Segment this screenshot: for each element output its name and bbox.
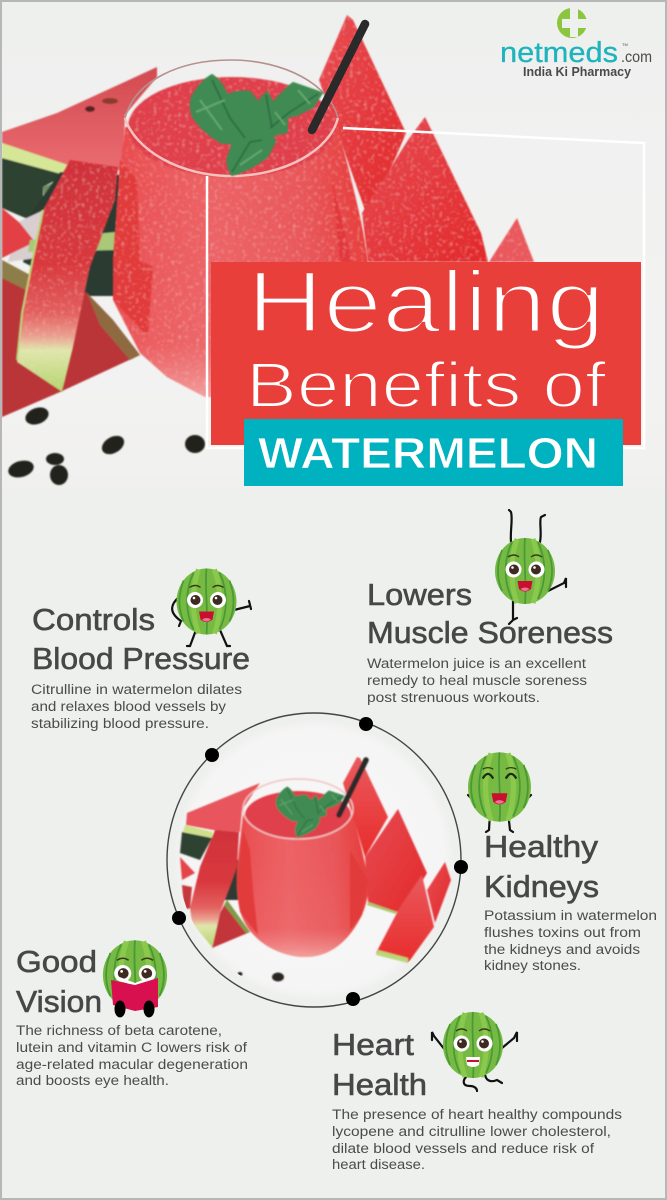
title line: Healing: Healing <box>247 254 605 351</box>
body text: lutein and vitamin C lowers risk of <box>16 1040 247 1056</box>
seeds <box>272 972 284 982</box>
netmeds logo: India Ki Pharmacy <box>523 65 631 79</box>
heading: Blood Pressure <box>32 641 250 676</box>
front melon slice <box>17 160 118 392</box>
body text: dilate blood vessels and reduce risk of <box>332 1141 594 1157</box>
glass <box>237 815 368 957</box>
body text: heart disease. <box>332 1157 425 1173</box>
straw <box>339 760 366 815</box>
glass rim <box>125 60 338 176</box>
icon: melon mascot doing handstand <box>495 510 566 624</box>
middle right wedge <box>362 117 488 262</box>
mint leaves <box>191 75 322 175</box>
middle wedge <box>365 809 427 912</box>
section: heart health <box>332 1012 622 1173</box>
title banner: watermelon: WATERMELON <box>258 429 598 478</box>
body text <box>31 682 242 732</box>
section: good vision <box>16 940 248 1089</box>
icon: melon mascot reading book <box>103 940 167 1018</box>
body text: age-related macular degeneration <box>16 1057 248 1073</box>
body text: and boosts eye health. <box>16 1073 169 1089</box>
heading <box>16 944 102 1019</box>
section: lowers muscle soreness <box>367 510 613 706</box>
heading <box>332 1027 427 1102</box>
heading <box>32 602 250 676</box>
body text: Potassium in watermelon <box>484 908 657 924</box>
body text: Citrulline in watermelon dilates <box>31 682 242 698</box>
small right wedge <box>489 218 534 262</box>
heading: Muscle Soreness <box>367 615 613 650</box>
body text: The presence of heart healthy compounds <box>332 1107 622 1123</box>
front wedge <box>376 875 434 963</box>
body text <box>367 656 587 706</box>
title frame line <box>207 128 644 448</box>
body text: The richness of beta carotene, <box>16 1023 222 1039</box>
body text <box>16 1023 248 1089</box>
heading: Healthy <box>484 829 599 864</box>
title line: Benefits of: Benefits of <box>246 349 606 421</box>
seeds <box>6 404 205 485</box>
body text <box>332 1107 622 1173</box>
heading: Vision <box>16 984 102 1019</box>
netmeds logo <box>500 5 652 79</box>
heading: Kidneys <box>484 869 599 904</box>
netmeds logo: TM <box>622 42 628 47</box>
mint <box>276 787 344 837</box>
heading <box>367 577 613 650</box>
section: controls blood pressure <box>31 568 251 732</box>
body text: lycopene and citrulline lower cholesterol, <box>332 1124 611 1140</box>
body text: the kidneys and avoids <box>484 942 640 958</box>
left melon pile <box>2 67 157 417</box>
body text: kidney stones. <box>484 958 581 974</box>
straw <box>312 24 365 130</box>
netmeds logo: netmeds <box>500 37 618 69</box>
icon: melon mascot jumping <box>432 1012 517 1091</box>
body text: and relaxes blood vessels by <box>31 699 227 715</box>
heading: Controls <box>32 602 155 637</box>
title banner: watermelon <box>244 419 623 486</box>
heading: Lowers <box>367 577 472 612</box>
tall wedge <box>343 757 388 857</box>
right small wedge <box>427 862 451 923</box>
icon: melon mascot waving <box>172 568 251 646</box>
connector dots <box>172 717 468 1006</box>
icon: melon mascot laughing <box>468 752 531 832</box>
front slice <box>190 830 239 947</box>
body text: flushes toxins out from <box>484 925 641 941</box>
hero photo: watermelon juice glass and slices <box>2 14 535 486</box>
body text <box>484 908 657 974</box>
section: healthy kidneys <box>468 752 657 974</box>
heading: Heart <box>332 1027 414 1062</box>
logo mark <box>557 5 592 38</box>
central circle with juice photo <box>167 713 468 1007</box>
title panel <box>211 254 641 445</box>
netmeds logo: .com <box>621 49 652 66</box>
body text: post strenuous workouts. <box>367 690 540 706</box>
body text: Watermelon juice is an excellent <box>367 656 586 672</box>
glass of juice <box>113 77 370 397</box>
heading: Good <box>16 944 97 979</box>
body text: stabilizing blood pressure. <box>31 716 209 732</box>
tall right wedge <box>319 15 406 213</box>
heading <box>484 829 599 904</box>
heading: Health <box>332 1067 427 1102</box>
body text: remedy to heal muscle soreness <box>367 673 587 689</box>
back melon <box>186 783 260 832</box>
